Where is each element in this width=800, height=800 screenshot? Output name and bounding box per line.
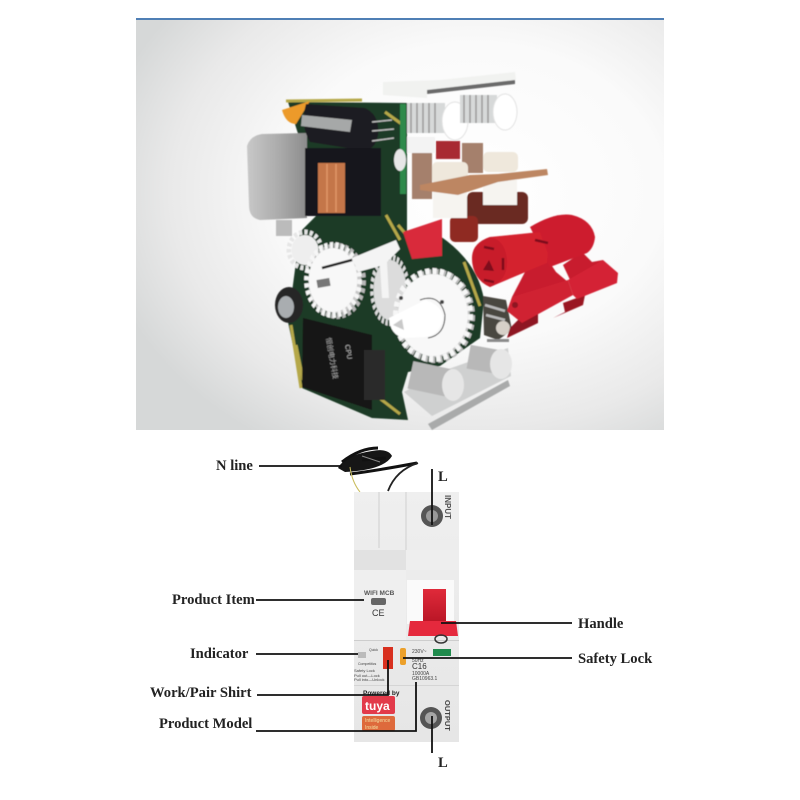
top cover and mount	[383, 72, 516, 98]
breaker body	[354, 492, 459, 742]
CCC mark	[435, 635, 447, 643]
tuya logo block	[362, 690, 400, 731]
tuya logo block: tuya	[365, 699, 390, 713]
tuya logo block: Intelligence	[365, 718, 391, 724]
red handle	[472, 214, 618, 338]
small round capacitor	[275, 287, 303, 323]
indicator and pair switch: Pull into—Unlock	[354, 677, 384, 682]
front bottom screws	[404, 345, 512, 430]
black capacitor	[301, 104, 394, 150]
CPU chip	[302, 318, 385, 410]
rating block: 230V~	[412, 649, 427, 655]
indicator and pair switch: Pull out—Lock	[354, 673, 380, 678]
red latch block	[403, 219, 442, 259]
indicator and pair switch	[354, 647, 393, 682]
CPU chip: 恒创电力科技	[324, 337, 340, 380]
photo panel: exploded breaker internals	[136, 18, 664, 430]
white T bracket	[352, 240, 400, 298]
callout: Work/Pair Shirt: Work/Pair Shirt	[150, 685, 252, 701]
output terminal screw: OUTPUT	[443, 700, 452, 731]
product diagram: smart breaker	[338, 448, 459, 742]
coils and copper plates	[407, 137, 548, 242]
CPU chip: CPU	[343, 344, 352, 360]
rating block: 50Hz	[412, 658, 424, 664]
indicator and pair switch: Safety Lock	[354, 668, 375, 673]
safety lock	[400, 648, 406, 665]
circuit board	[286, 100, 484, 420]
rating block	[412, 649, 451, 682]
handle	[407, 580, 458, 636]
gray motor housing	[247, 133, 307, 236]
rating block: GB10963.1	[412, 676, 438, 682]
indicator and pair switch: Competitics	[358, 662, 377, 666]
callout: Work/Pair Shirt	[150, 660, 388, 701]
product item text: CE	[372, 608, 385, 618]
input terminal screw: INPUT	[443, 495, 452, 519]
callout: L input	[432, 469, 448, 525]
callout: Safety Lock: Safety Lock	[578, 651, 653, 667]
tuya logo block: Inside	[365, 725, 379, 731]
small left gear	[289, 232, 321, 268]
callout: N line: N line	[216, 458, 253, 474]
rating block: 10000A	[412, 671, 430, 677]
mechanism behind handle	[483, 296, 512, 342]
output terminal screw	[420, 700, 452, 731]
orange tag	[282, 101, 310, 124]
indicator and pair switch: Quick	[369, 648, 378, 652]
large white gear with cam	[389, 271, 472, 360]
rating block: C16	[412, 662, 427, 671]
back gear teeth	[372, 257, 408, 323]
white gear with shaft	[306, 245, 364, 316]
callout: L output	[432, 716, 448, 771]
product item text: WIFI MCB	[364, 590, 395, 597]
input terminal screw	[421, 495, 452, 527]
transformer with copper winding	[305, 148, 381, 216]
callout: Product Model: Product Model	[159, 716, 252, 732]
callout: Handle: Handle	[578, 616, 624, 632]
callout: N line	[216, 458, 342, 474]
callout: L output: L	[438, 755, 448, 771]
callout: L input: L	[438, 469, 448, 485]
N line cable	[338, 448, 418, 492]
callout: Product Item: Product Item	[172, 592, 255, 608]
callout: Indicator: Indicator	[190, 646, 249, 662]
product item text	[364, 590, 395, 618]
callout: Product Model	[159, 682, 416, 732]
tuya logo block: Powered by	[363, 690, 400, 697]
rear screws	[407, 94, 517, 140]
